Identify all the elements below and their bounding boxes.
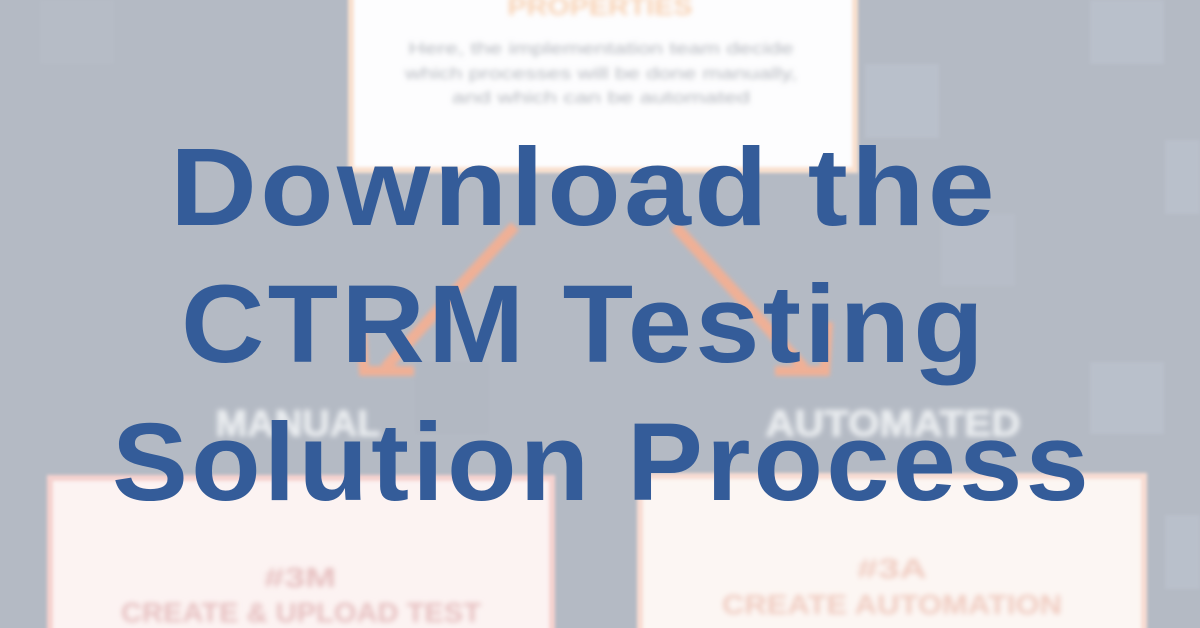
- panel: top properties box: [351, 0, 855, 170]
- title: Download the: [170, 126, 998, 249]
- text block: description: Here, the implementation team decide: [408, 39, 794, 58]
- text: step 3M: #3M: [264, 562, 336, 593]
- text: step 3A: [722, 553, 1062, 620]
- label: automated: AUTOMATED: [766, 403, 1020, 444]
- text: step 3A: CREATE AUTOMATION: [722, 589, 1062, 620]
- title: Solution Process: [112, 401, 1092, 524]
- title: [112, 126, 1092, 524]
- text: step 3M: [121, 562, 481, 628]
- panel: step 3A: [640, 476, 1144, 628]
- title: CTRM Testing: [181, 263, 987, 386]
- text: step 3M: CREATE & UPLOAD TEST: [121, 597, 481, 628]
- arrow: to manual: [361, 226, 515, 371]
- text block: description: and which can be automated: [452, 88, 750, 107]
- text block: description: [404, 39, 797, 107]
- label: manual: MANUAL: [216, 403, 380, 444]
- arrow: to automated: [675, 226, 828, 371]
- text block: description: which processes will be done manually,: [404, 64, 797, 83]
- text: step 3A: #3A: [857, 553, 927, 584]
- panel: step 3M: [50, 478, 552, 628]
